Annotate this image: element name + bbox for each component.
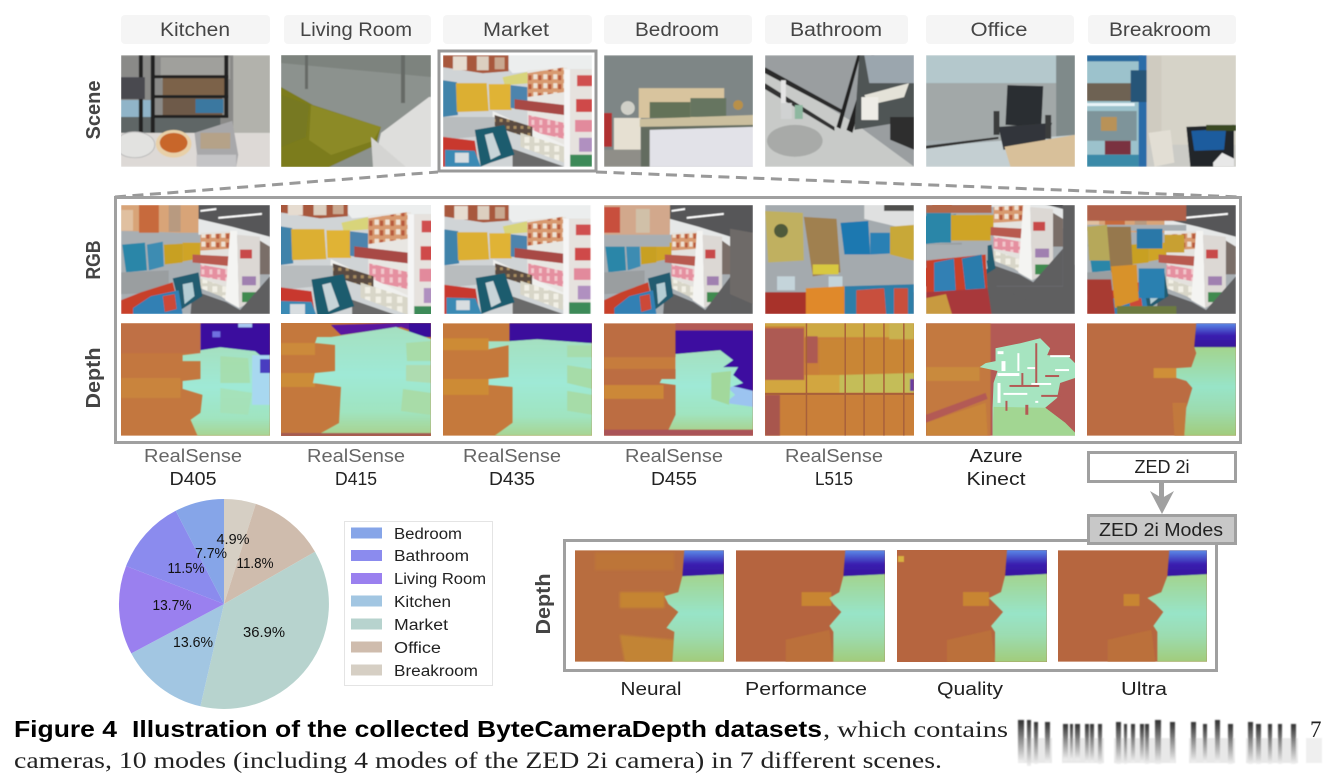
scene photo: office bbox=[926, 55, 1075, 167]
garbled caption smear bbox=[1018, 720, 1322, 766]
camera labels bbox=[144, 446, 1026, 489]
RGB: D415 bbox=[281, 205, 431, 314]
scene photo: market with highlight bbox=[439, 51, 596, 171]
RGB: D455 bbox=[604, 205, 753, 314]
depth: D455 bbox=[604, 323, 753, 436]
mode labels: Quality bbox=[937, 679, 1003, 699]
legend: Office bbox=[394, 640, 441, 657]
caption: Illustration of the collected ByteCameraDepth datasets bbox=[132, 716, 822, 742]
camera labels: RealSense bbox=[785, 446, 883, 466]
depth: ZED 2i bbox=[1087, 323, 1236, 436]
legend: Kitchen bbox=[394, 594, 451, 611]
camera labels: D405 bbox=[170, 469, 216, 489]
legend: Bathroom bbox=[394, 548, 469, 565]
depth: D435 bbox=[443, 323, 592, 436]
mode labels bbox=[620, 679, 1168, 699]
scene headers: Bedroom bbox=[635, 20, 719, 41]
camera labels: L515 bbox=[815, 469, 853, 489]
RGB: D405 bbox=[121, 205, 270, 314]
scene photo: kitchen bbox=[121, 55, 270, 167]
legend: Living Room bbox=[394, 571, 486, 588]
pie chart: 13.6% bbox=[173, 635, 213, 651]
row labels bbox=[83, 80, 105, 408]
depth: L515 bbox=[765, 323, 914, 436]
camera labels: D455 bbox=[651, 469, 697, 489]
RGB: Azure Kinect bbox=[926, 205, 1075, 314]
pie chart: 11.8% bbox=[236, 556, 274, 572]
row labels: Depth bbox=[83, 348, 105, 408]
pie chart bbox=[119, 499, 329, 709]
pie chart: 13.7% bbox=[152, 598, 192, 614]
camera labels: RealSense bbox=[307, 446, 405, 466]
camera labels: RealSense bbox=[144, 446, 242, 466]
pie chart: 4.9% bbox=[216, 532, 250, 548]
depth: performance bbox=[736, 550, 885, 662]
row labels: Scene bbox=[83, 80, 105, 140]
mode labels: Ultra bbox=[1121, 679, 1168, 699]
scene photo: living room bbox=[281, 55, 431, 167]
legend: Bedroom bbox=[394, 526, 462, 543]
scene headers: Office bbox=[970, 20, 1028, 41]
arrow: ZED 2i to modes bbox=[1150, 482, 1174, 514]
scene headers: Bathroom bbox=[790, 20, 882, 41]
camera labels: D435 bbox=[489, 469, 535, 489]
scene headers bbox=[121, 15, 1236, 44]
depth: ultra bbox=[1058, 550, 1207, 662]
ZED 2i Modes box: ZED 2i Modes bbox=[1099, 520, 1223, 540]
legend: Market bbox=[394, 617, 449, 634]
camera labels: RealSense bbox=[463, 446, 561, 466]
depth: D405 bbox=[121, 323, 270, 436]
depth: Azure Kinect bbox=[926, 323, 1075, 436]
scene headers: Kitchen bbox=[160, 20, 230, 41]
scene photo: bedroom bbox=[604, 55, 753, 167]
camera labels: D415 bbox=[335, 469, 377, 489]
caption bbox=[14, 716, 1322, 773]
caption: Figure 4 bbox=[14, 716, 117, 742]
scene photo: bathroom bbox=[765, 55, 914, 167]
row labels: RGB bbox=[83, 240, 105, 280]
camera labels: RealSense bbox=[625, 446, 723, 466]
legend bbox=[344, 522, 492, 686]
ZED 2i Modes box bbox=[1088, 516, 1236, 544]
pie chart: 11.5% bbox=[168, 561, 205, 577]
pie chart: 7.7% bbox=[195, 546, 227, 562]
pie chart: 36.9% bbox=[243, 625, 285, 641]
panel: ZED 2i mode depth maps bbox=[564, 540, 1216, 670]
mode labels: Neural bbox=[620, 679, 682, 699]
panel: market RGB and depth across cameras bbox=[116, 198, 1240, 442]
caption: cameras, 10 modes (including 4 modes of the ZED 2i camera) in 7 different scenes. bbox=[14, 748, 942, 773]
depth: D415 bbox=[281, 323, 431, 436]
caption: 7 bbox=[1310, 717, 1322, 742]
RGB: L515 bbox=[765, 205, 914, 314]
RGB: ZED 2i bbox=[1087, 205, 1236, 314]
scene headers: Market bbox=[483, 20, 550, 41]
ZED 2i box: ZED 2i bbox=[1134, 457, 1190, 477]
modes depth label: Depth bbox=[533, 574, 555, 634]
ZED 2i box bbox=[1088, 452, 1236, 482]
RGB: D435 bbox=[444, 205, 592, 314]
camera labels: Azure bbox=[970, 446, 1022, 466]
caption: , which contains bbox=[823, 717, 1008, 742]
camera labels: Kinect bbox=[966, 469, 1026, 489]
mode labels: Performance bbox=[745, 679, 867, 699]
depth: neural bbox=[575, 550, 724, 662]
scene headers: Breakroom bbox=[1109, 20, 1211, 41]
scene headers: Living Room bbox=[300, 20, 412, 41]
legend: Breakroom bbox=[394, 663, 478, 680]
zoom dashed connector lines bbox=[115, 172, 1241, 197]
depth: quality bbox=[897, 550, 1047, 662]
scene photo: breakroom bbox=[1087, 55, 1236, 167]
